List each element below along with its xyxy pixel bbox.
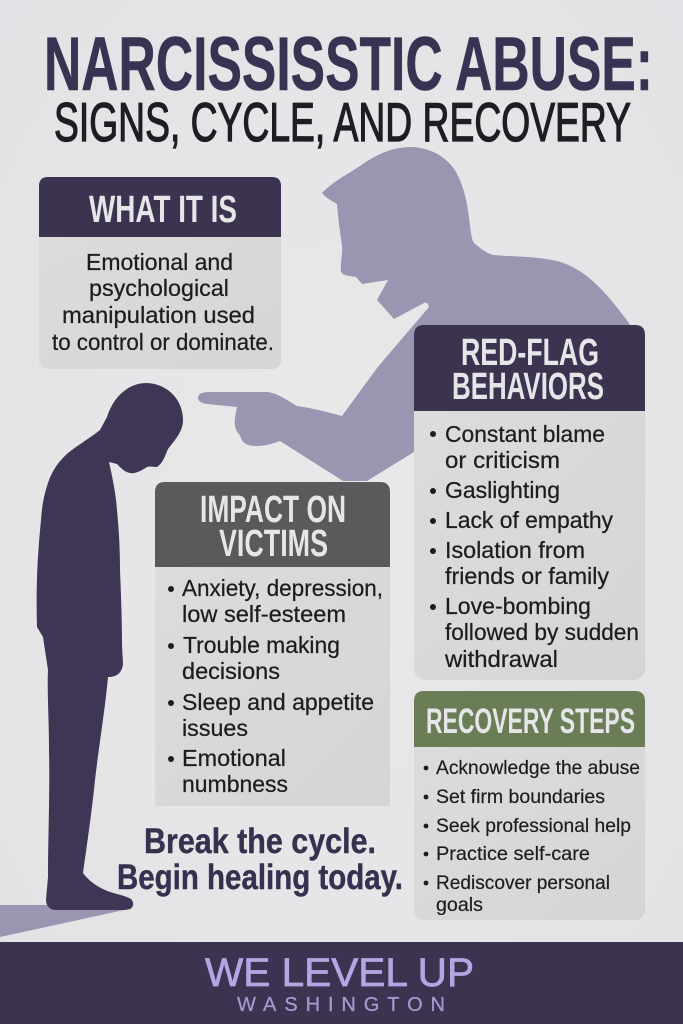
- panel body: [155, 560, 390, 806]
- panel: what it is: [39, 177, 281, 369]
- aggressor silhouette pointing: [198, 147, 634, 481]
- bullet list: or criticism: [445, 447, 560, 473]
- bullet list: Isolation from: [445, 537, 585, 563]
- bullet list: Acknowledge the abuse: [436, 757, 640, 779]
- description text: to control or dominate.: [52, 329, 274, 355]
- bullet list: goals: [436, 894, 483, 916]
- bullet list: Lack of empathy: [445, 507, 613, 533]
- bullet list: [424, 757, 640, 916]
- bullet list: Gaslighting: [445, 477, 560, 503]
- bullet list: Trouble making: [183, 632, 340, 658]
- heading: [200, 489, 346, 565]
- panel: recovery steps: [414, 691, 645, 920]
- bullet list: issues: [182, 715, 248, 741]
- panel body: [39, 225, 281, 369]
- bullet list: decisions: [182, 658, 280, 684]
- description text: Emotional and: [86, 249, 233, 275]
- bullet list: Rediscover personal: [436, 872, 610, 894]
- description text: manipulation used: [62, 302, 255, 328]
- bullet list: friends or family: [445, 563, 610, 589]
- title: [44, 22, 653, 153]
- victim silhouette head bowed: [37, 383, 183, 910]
- panel header: [414, 691, 645, 747]
- call to action: Begin healing today.: [117, 858, 403, 897]
- bullet list: [430, 421, 639, 672]
- brand location: WASHINGTON: [237, 994, 445, 1016]
- bullet list: Set firm boundaries: [436, 786, 605, 808]
- bullet list: followed by sudden: [445, 619, 639, 645]
- heading: BEHAVIORS: [452, 366, 604, 408]
- description text: psychological: [89, 275, 229, 301]
- heading: VICTIMS: [219, 523, 328, 565]
- brand name: WE LEVEL UP: [205, 951, 474, 995]
- bullet list: Anxiety, depression,: [182, 575, 383, 601]
- panel body: [414, 400, 645, 680]
- call to action: Break the cycle.: [144, 822, 376, 861]
- shadow on floor: [0, 905, 124, 937]
- bullet list: Seek professional help: [436, 815, 631, 837]
- heading: WHAT IT IS: [89, 189, 237, 231]
- call to action: [117, 822, 403, 897]
- panel body: [414, 735, 645, 920]
- bullet list: low self-esteem: [182, 601, 346, 627]
- bullet list: withdrawal: [444, 646, 558, 672]
- panel: impact on victims: [155, 482, 390, 806]
- description text: [52, 249, 274, 355]
- panel header: [39, 177, 281, 237]
- heading: RED-FLAG: [461, 332, 599, 374]
- bullet list: [168, 575, 383, 797]
- bullet list: Constant blame: [445, 421, 605, 447]
- panel: red-flag behaviors: [414, 325, 645, 680]
- heading: [452, 332, 604, 408]
- panel header: [155, 482, 390, 567]
- bullet list: Practice self-care: [436, 843, 590, 865]
- heading: IMPACT ON: [200, 489, 346, 531]
- bullet list: Emotional: [182, 745, 286, 771]
- bullet list: numbness: [182, 771, 288, 797]
- footer band: [0, 942, 683, 1024]
- bullet list: Love-bombing: [445, 593, 591, 619]
- panel header: [414, 325, 645, 411]
- bullet list: Sleep and appetite: [182, 689, 374, 715]
